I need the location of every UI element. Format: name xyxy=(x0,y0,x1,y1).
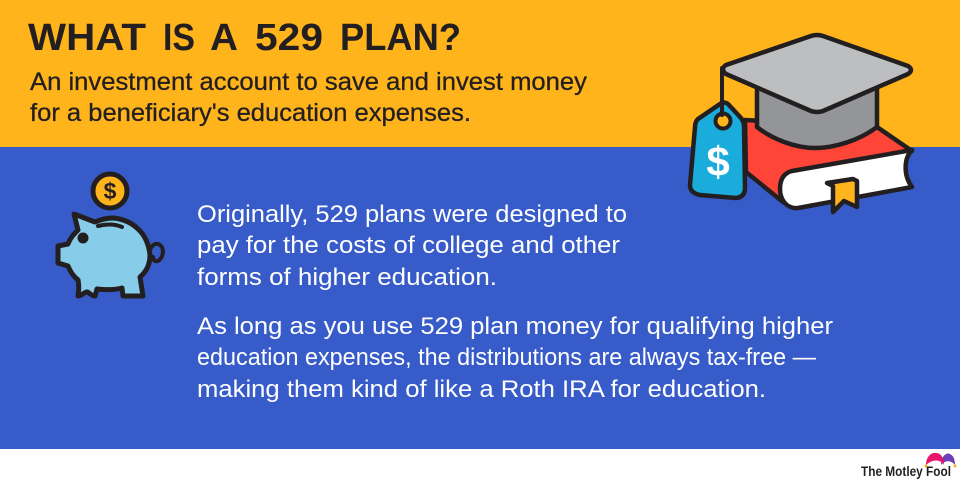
icon: price tag xyxy=(690,102,745,198)
title: A xyxy=(210,17,238,59)
subtitle xyxy=(30,68,588,127)
icon: tag hole xyxy=(716,114,730,128)
title: IS xyxy=(163,17,195,59)
subtitle: for a beneficiary's education expenses. xyxy=(30,99,471,127)
icon: tail xyxy=(150,244,163,261)
title xyxy=(28,17,461,59)
icon: book cover xyxy=(745,120,912,205)
logo: The Motley Fool xyxy=(861,453,956,479)
subtitle: An investment account to save and invest money xyxy=(30,68,588,96)
icon: graduation cap, book and price tag xyxy=(690,35,912,212)
title: 529 xyxy=(255,17,323,59)
text block: tax-free distributions: education expenses, the distributions are always tax-free — xyxy=(197,344,816,371)
text block: origin of 529 plans: pay for the costs of college and other xyxy=(197,232,620,259)
icon: cap base xyxy=(757,85,877,148)
text block: tax-free distributions: As long as you use 529 plan money for qualifying higher xyxy=(197,313,833,340)
icon: piggy body xyxy=(58,214,150,296)
icon: cap top xyxy=(723,35,911,112)
icon: tag dollar sign: $ xyxy=(706,138,730,185)
panel: body band xyxy=(0,147,960,449)
text block: tax-free distributions xyxy=(197,313,833,403)
text block: origin of 529 plans: forms of higher education. xyxy=(197,264,497,291)
panel: header band xyxy=(0,0,960,147)
title: PLAN? xyxy=(340,17,461,59)
text block: origin of 529 plans xyxy=(197,201,627,291)
icon: piggy bank with coin xyxy=(58,174,163,296)
text block: tax-free distributions: making them kind of like a Roth IRA for education. xyxy=(197,376,766,403)
icon: coin: $ xyxy=(104,178,117,204)
icon: tag string xyxy=(720,68,724,115)
icon: bookmark xyxy=(827,179,857,212)
icon: eye xyxy=(80,235,86,241)
icon: jester hat xyxy=(924,453,956,468)
text block: origin of 529 plans: Originally, 529 plans were designed to xyxy=(197,201,627,228)
icon: coin slot xyxy=(98,225,122,227)
icon: book pages xyxy=(780,150,912,208)
title: WHAT xyxy=(28,17,146,59)
